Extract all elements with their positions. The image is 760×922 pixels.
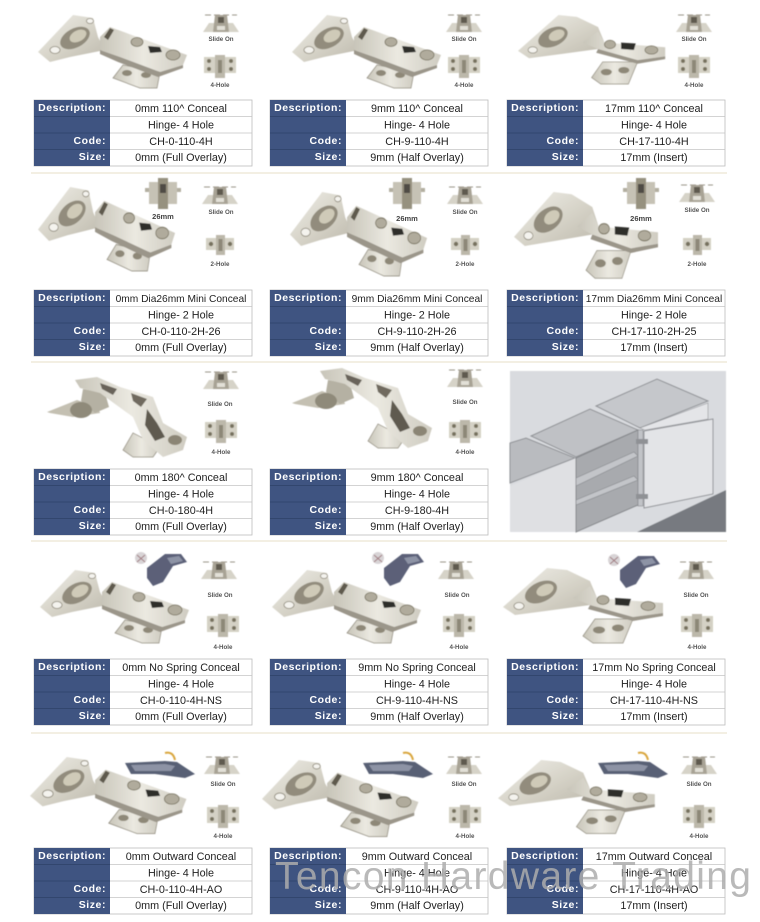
product: 9mm outward conceal	[262, 753, 488, 914]
spec table: Code:	[310, 325, 342, 337]
icon: slide on plate	[202, 187, 238, 204]
icon: 4-hole plate	[449, 805, 481, 828]
icon: 4-hole plate	[207, 805, 239, 828]
spec table: Code:	[310, 694, 342, 706]
label: slide on: Slide On	[452, 399, 478, 406]
spec table	[34, 290, 252, 356]
hinge photo	[292, 368, 432, 448]
spec table	[270, 290, 488, 356]
spec table: CH-0-110-4H-AO	[140, 884, 222, 896]
label: 2-hole: 2-Hole	[211, 261, 230, 268]
icon: 4-hole plate	[443, 614, 475, 637]
spec table: 0mm (Full Overlay)	[135, 342, 227, 354]
product: 0mm 110 conceal	[34, 15, 252, 166]
spec table: Description:	[274, 471, 342, 483]
spec table: Description:	[38, 661, 106, 673]
spec table	[507, 290, 725, 356]
spec table: 0mm Dia26mm Mini Conceal	[116, 294, 246, 305]
spec table: Description:	[38, 102, 106, 114]
spec table: Code:	[310, 135, 342, 147]
icon: slide on plate	[678, 562, 714, 579]
spec table	[507, 659, 725, 725]
label: 4-hole: 4-Hole	[685, 82, 704, 89]
label: 26mm: 26mm	[630, 214, 652, 223]
spec table: Hinge- 4 Hole	[148, 678, 214, 690]
icon: 4-hole plate	[683, 805, 715, 828]
label: slide on: Slide On	[451, 781, 477, 788]
spec table: 9mm (Half Overlay)	[370, 711, 464, 723]
product: 0mm 180 conceal	[34, 372, 252, 535]
spec table: Code:	[546, 325, 579, 337]
spec table: 17mm (Insert)	[620, 900, 688, 912]
spec table: Size:	[79, 151, 106, 163]
watermark: Tencon Hardware Trading	[275, 855, 751, 898]
spec table: Description:	[511, 292, 579, 304]
spec table: 17mm (Insert)	[620, 152, 688, 164]
spec table: Description:	[274, 850, 342, 862]
spec table: Size:	[315, 899, 342, 911]
spec table: Code:	[546, 883, 579, 895]
icon: 26mm mounting plate	[623, 178, 659, 209]
label: slide on: Slide On	[207, 401, 233, 408]
label: slide on: Slide On	[444, 592, 470, 599]
spec table: Size:	[315, 151, 342, 163]
spec table: 0mm (Full Overlay)	[135, 900, 227, 912]
icon: 4-hole plate	[448, 55, 480, 78]
spec table: 9mm Dia26mm Mini Conceal	[352, 294, 482, 305]
label: 2-hole: 2-Hole	[456, 261, 475, 268]
label: slide on: Slide On	[210, 781, 236, 788]
spec table: Description:	[274, 292, 342, 304]
spec table: CH-17-110-2H-25	[611, 326, 697, 338]
label: 4-hole: 4-Hole	[456, 449, 475, 456]
spec table: Hinge- 4 Hole	[384, 488, 450, 500]
spec table: 0mm Outward Conceal	[126, 851, 236, 863]
product: 9mm 180 conceal	[270, 368, 488, 535]
label: slide on: Slide On	[683, 592, 709, 599]
spec table: Code:	[74, 694, 106, 706]
spec table	[34, 100, 252, 166]
label: 26mm: 26mm	[152, 212, 174, 221]
icon: slide on plate	[204, 757, 240, 774]
spec table: Code:	[546, 694, 579, 706]
spec table: Size:	[552, 151, 579, 163]
hinge photo	[38, 15, 187, 88]
hinge photo	[30, 757, 186, 834]
label: 26mm: 26mm	[396, 214, 418, 223]
spec table: CH-9-110-4H-NS	[376, 695, 458, 707]
hinge photo	[498, 760, 655, 834]
spec table: Hinge- 2 Hole	[148, 310, 214, 322]
spec table: CH-0-110-4H-NS	[140, 695, 222, 707]
label: 4-hole: 4-Hole	[688, 644, 707, 651]
spec table	[34, 469, 252, 535]
spec table: CH-17-110-4H	[619, 136, 689, 148]
spec table: Code:	[74, 883, 106, 895]
spec table: CH-0-110-4H	[149, 136, 213, 148]
spec table: 17mm Dia26mm Mini Conceal	[586, 294, 722, 305]
label: slide on: Slide On	[452, 209, 478, 216]
label: slide on: Slide On	[451, 36, 477, 43]
spec table: 0mm No Spring Conceal	[122, 662, 240, 674]
label: 2-hole: 2-Hole	[688, 261, 707, 268]
label: slide on: Slide On	[207, 592, 233, 599]
label: 4-hole: 4-Hole	[450, 644, 469, 651]
label: 4-hole: 4-Hole	[214, 644, 233, 651]
spec table: CH-9-110-2H-26	[377, 326, 457, 338]
spec table: 9mm No Spring Conceal	[358, 662, 476, 674]
icon: 2-hole plate	[683, 235, 711, 255]
icon: 4-hole plate	[204, 55, 236, 78]
product: 0mm outward conceal	[30, 753, 252, 914]
spec table: Hinge- 4 Hole	[621, 120, 687, 132]
spec table: 17mm (Insert)	[620, 711, 688, 723]
icon: automatic open detail	[125, 753, 195, 778]
product: 0mm no spring conceal	[34, 552, 252, 725]
spec table: Size:	[315, 341, 342, 353]
spec table: Size:	[552, 710, 579, 722]
spec table: Code:	[310, 883, 342, 895]
spec table: Size:	[79, 520, 106, 532]
hinge photo	[514, 192, 658, 278]
spec table: Hinge- 4 Hole	[384, 678, 450, 690]
icon: slide on plate	[203, 15, 239, 32]
hinge photo	[272, 570, 421, 643]
spec table: 9mm (Half Overlay)	[370, 521, 464, 533]
label: slide on: Slide On	[686, 781, 712, 788]
spec table: 0mm (Full Overlay)	[135, 152, 227, 164]
label: 4-hole: 4-Hole	[212, 449, 231, 456]
spec table: CH-9-110-4H	[385, 136, 449, 148]
hinge photo	[518, 15, 665, 84]
spec table: CH-17-110-4H-AO	[610, 884, 698, 896]
spec table: Size:	[79, 899, 106, 911]
spec table: Hinge- 4 Hole	[621, 678, 687, 690]
spec table: CH-9-110-4H-AO	[376, 884, 458, 896]
spec table: Hinge- 2 Hole	[621, 310, 687, 322]
product: 0mm dia26mm mini conceal	[34, 178, 252, 356]
spec table: Code:	[310, 504, 342, 516]
label: slide on: Slide On	[681, 36, 707, 43]
label: 4-hole: 4-Hole	[455, 82, 474, 89]
icon: slide on plate	[446, 15, 482, 32]
product: 9mm dia26mm mini conceal	[270, 178, 488, 356]
icon: 4-hole plate	[449, 420, 481, 443]
icon: no spring detail	[135, 552, 187, 586]
icon: slide on plate	[201, 562, 237, 579]
spec table: 0mm (Full Overlay)	[135, 521, 227, 533]
hinge photo	[40, 570, 189, 643]
icon: slide on plate	[681, 757, 717, 774]
spec table: CH-0-110-2H-26	[141, 326, 221, 338]
label: slide on: Slide On	[208, 36, 234, 43]
spec table: Size:	[315, 520, 342, 532]
hinge photo	[292, 15, 441, 88]
icon: slide on plate	[676, 15, 712, 32]
spec table: CH-0-180-4H	[149, 505, 213, 517]
icon: 4-hole plate	[678, 55, 710, 78]
icon: 4-hole plate	[205, 420, 237, 443]
spec table: Size:	[79, 710, 106, 722]
spec table: Size:	[552, 899, 579, 911]
icon: 26mm mounting plate	[389, 178, 425, 209]
spec table: Hinge- 2 Hole	[384, 310, 450, 322]
spec table	[270, 469, 488, 535]
icon: slide on plate	[447, 370, 483, 387]
icon: slide on plate	[446, 757, 482, 774]
hinge photo	[38, 187, 175, 271]
label: 4-hole: 4-Hole	[690, 833, 709, 840]
spec table: Code:	[74, 325, 106, 337]
spec table: 17mm (Insert)	[620, 342, 688, 354]
icon: 2-hole plate	[206, 235, 234, 255]
spec table: 0mm 180^ Conceal	[135, 472, 227, 484]
spec table: Size:	[552, 341, 579, 353]
spec table	[507, 100, 725, 166]
spec table: 17mm No Spring Conceal	[592, 662, 716, 674]
spec table: Description:	[274, 661, 342, 673]
hinge photo	[290, 192, 427, 276]
spec table: Description:	[38, 292, 106, 304]
label: slide on: Slide On	[208, 209, 234, 216]
spec table: Size:	[315, 710, 342, 722]
spec table: Hinge- 4 Hole	[621, 868, 687, 880]
hinge photo	[47, 377, 187, 457]
spec table: 9mm (Half Overlay)	[370, 900, 464, 912]
spec table: Hinge- 4 Hole	[148, 868, 214, 880]
spec table: CH-9-180-4H	[385, 505, 449, 517]
spec table: 9mm 110^ Conceal	[371, 103, 463, 115]
spec table	[270, 848, 488, 914]
icon: 4-hole plate	[207, 614, 239, 637]
product: 17mm no spring conceal	[503, 554, 725, 725]
spec table	[34, 659, 252, 725]
product: 9mm 110 conceal	[270, 15, 488, 166]
spec table: 0mm 110^ Conceal	[135, 103, 227, 115]
spec table	[507, 848, 725, 914]
spec table: 9mm 180^ Conceal	[371, 472, 463, 484]
label: 4-hole: 4-Hole	[456, 833, 475, 840]
spec table: 9mm (Half Overlay)	[370, 342, 464, 354]
label: slide on: Slide On	[684, 207, 710, 214]
spec table	[34, 848, 252, 914]
spec table: Hinge- 4 Hole	[148, 488, 214, 500]
hinge photo	[262, 760, 418, 837]
spec table: Size:	[79, 341, 106, 353]
product: 17mm outward conceal	[498, 753, 725, 914]
spec table: Description:	[274, 102, 342, 114]
icon: automatic open detail	[363, 753, 433, 778]
spec table: Code:	[74, 504, 106, 516]
label: 4-hole: 4-Hole	[211, 82, 230, 89]
icon: 2-hole plate	[451, 235, 479, 255]
spec table: 9mm (Half Overlay)	[370, 152, 464, 164]
icon: 26mm mounting plate	[145, 178, 181, 209]
icon: automatic open detail	[598, 753, 668, 778]
spec table: Code:	[546, 135, 579, 147]
icon: no spring detail	[372, 552, 424, 586]
icon: slide on plate	[203, 372, 239, 389]
product: 17mm dia26mm mini conceal	[507, 178, 725, 356]
spec table: Code:	[74, 135, 106, 147]
spec table: CH-17-110-4H-NS	[610, 695, 698, 707]
icon: slide on plate	[447, 187, 483, 204]
spec table: Hinge- 4 Hole	[384, 868, 450, 880]
spec table: Description:	[511, 850, 579, 862]
spec table: 17mm Outward Conceal	[596, 851, 712, 863]
spec table: Description:	[511, 102, 579, 114]
spec table	[270, 659, 488, 725]
spec table: Description:	[511, 661, 579, 673]
row separators	[31, 173, 727, 733]
spec table: Hinge- 4 Hole	[148, 120, 214, 132]
spec table: Description:	[38, 850, 106, 862]
hinge photo	[503, 568, 663, 643]
product: 9mm no spring conceal	[270, 552, 488, 725]
label: 4-hole: 4-Hole	[214, 833, 233, 840]
spec table: 0mm (Full Overlay)	[135, 711, 227, 723]
panel: cabinet diagram	[510, 371, 726, 532]
spec table: 9mm Outward Conceal	[362, 851, 472, 863]
spec table: Hinge- 4 Hole	[384, 120, 450, 132]
icon: no spring detail	[608, 554, 660, 588]
spec table: Description:	[38, 471, 106, 483]
icon: slide on plate	[679, 185, 715, 202]
product: 17mm 110 conceal	[507, 15, 725, 166]
icon: 4-hole plate	[681, 614, 713, 637]
spec table	[270, 100, 488, 166]
icon: slide on plate	[438, 562, 474, 579]
spec table: 17mm 110^ Conceal	[605, 103, 703, 115]
